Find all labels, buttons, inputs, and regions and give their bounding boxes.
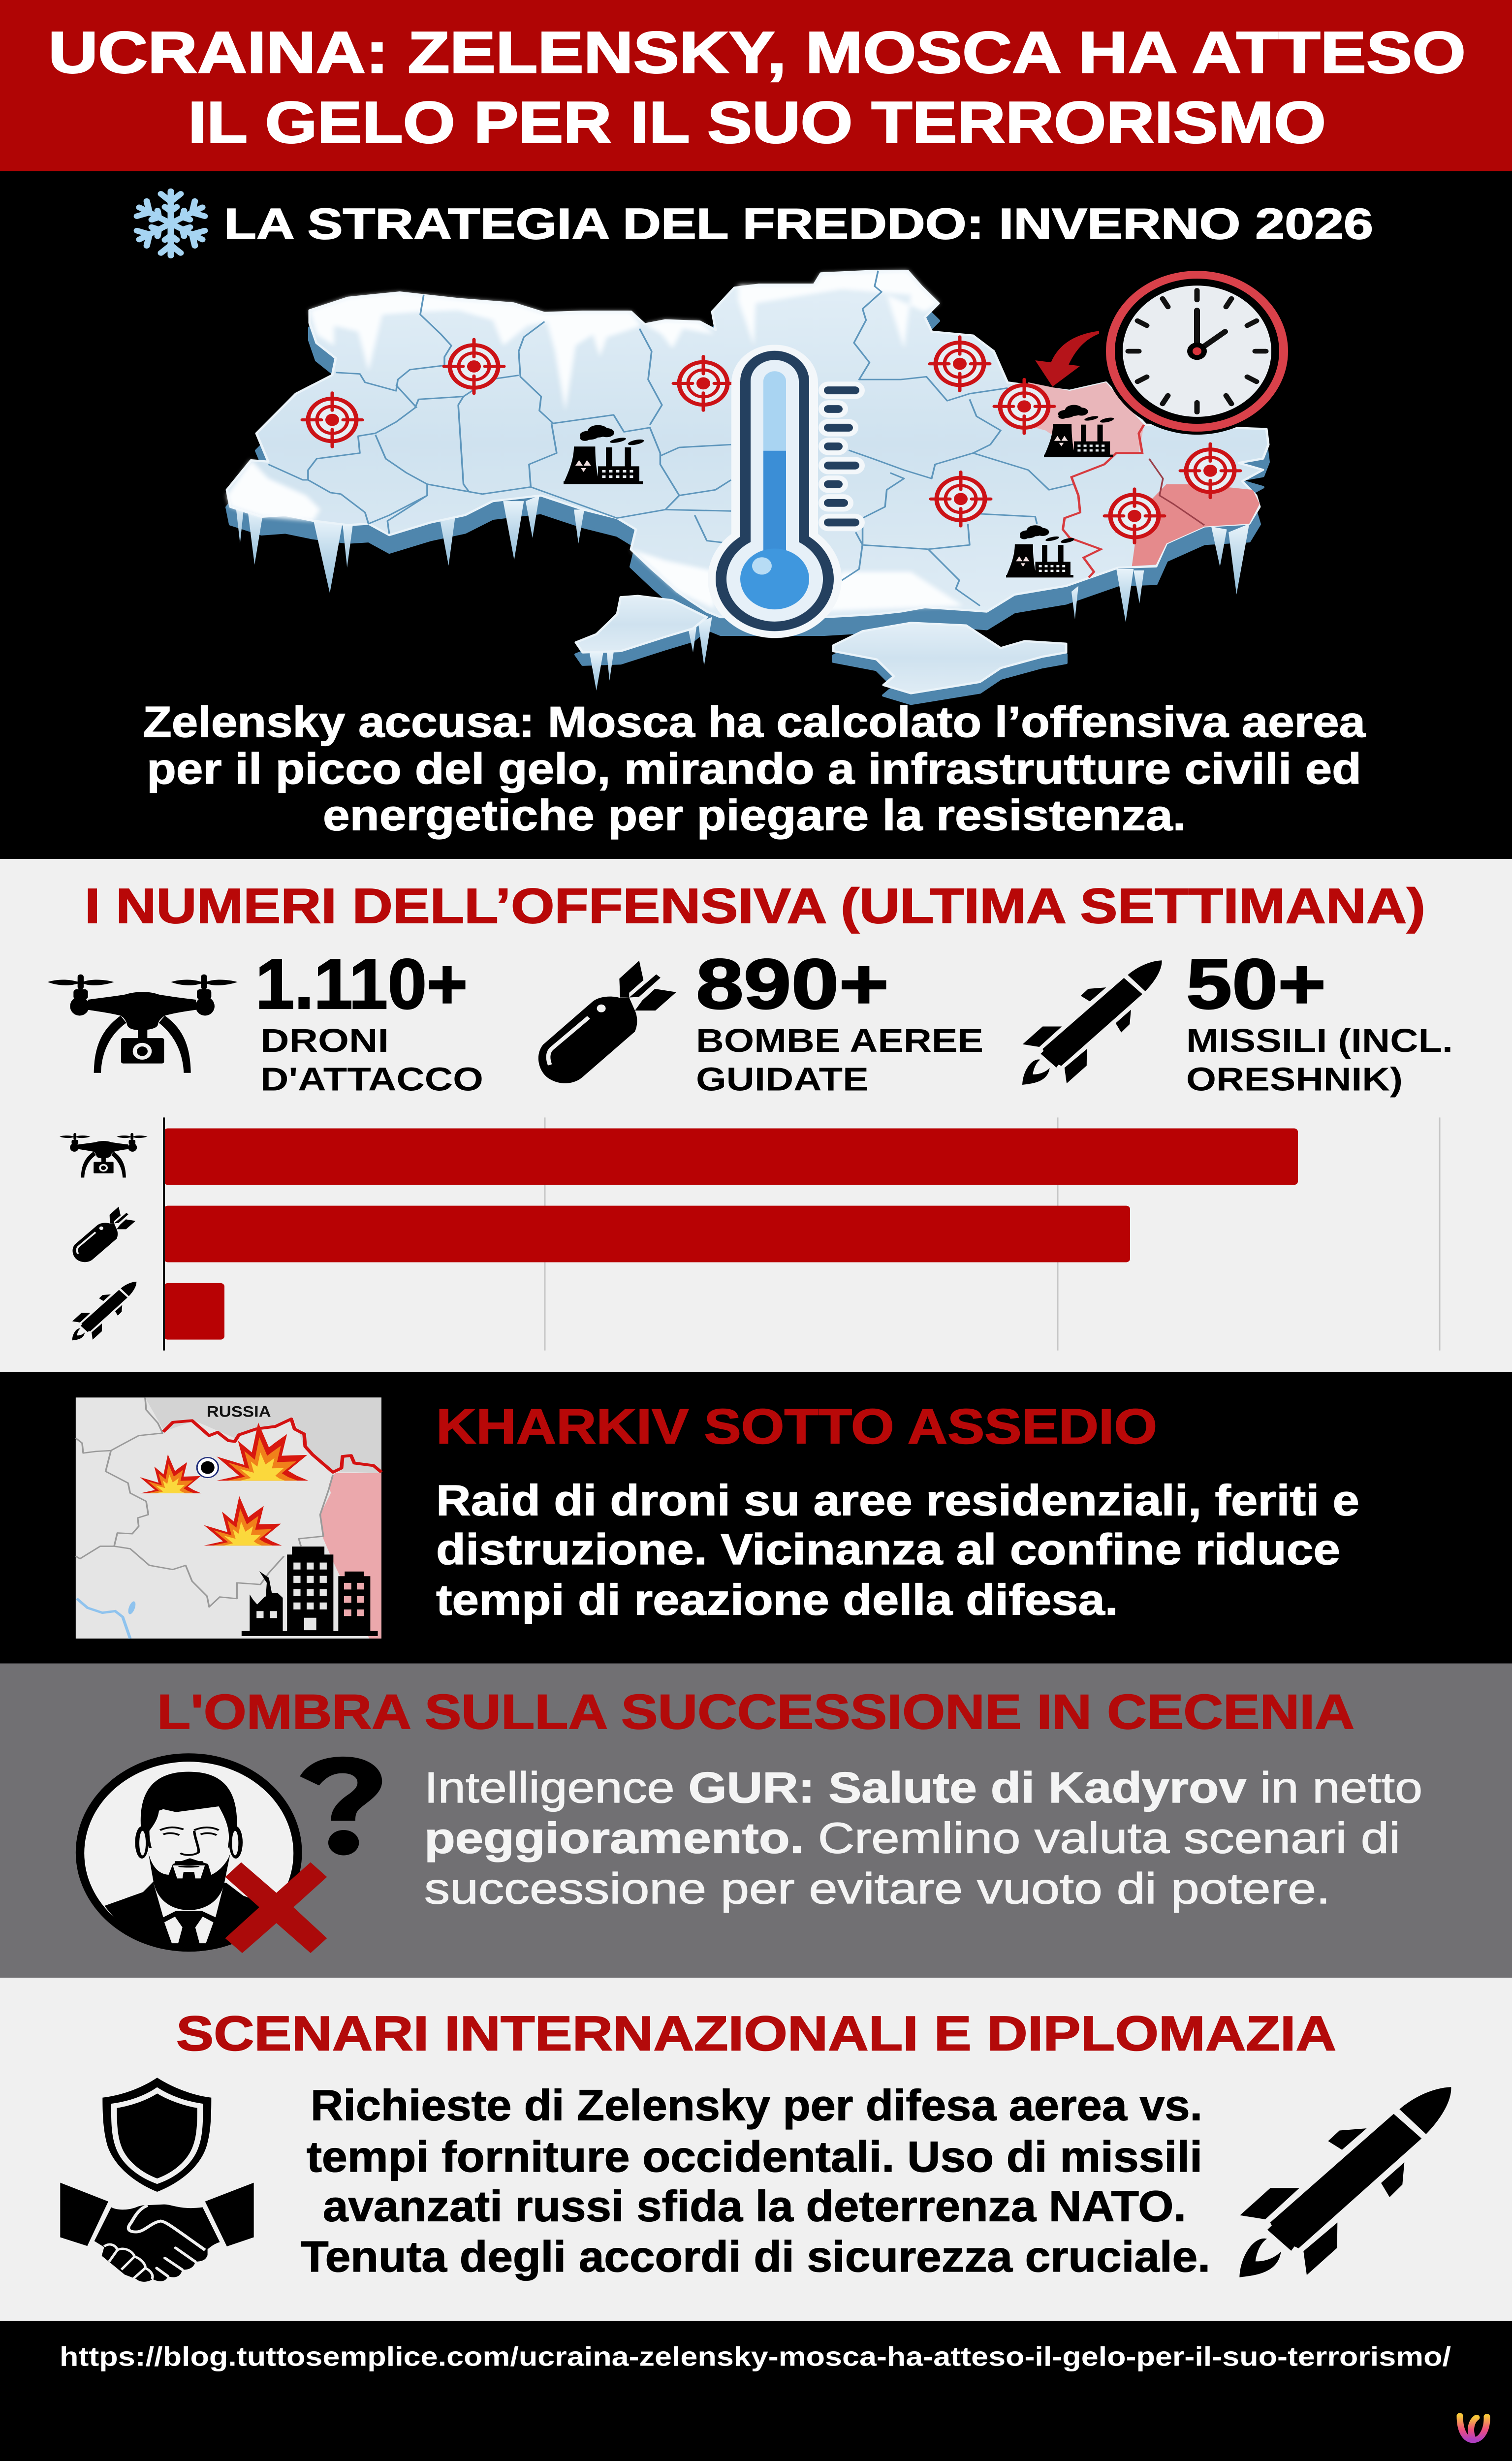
title: IL GELO PER IL SUO TERRORISMO — [188, 90, 1326, 155]
occupied areas and front line — [1025, 382, 1260, 577]
panel: offensive numbers — [0, 859, 1512, 1372]
icon: portrait with question mark and cross — [76, 1753, 382, 1953]
icon: damaged buildings — [242, 1546, 378, 1636]
stat: bombs — [538, 945, 983, 1098]
text: Zelensky accusation: per il picco del gelo, mirando a infrastrutture civili ed — [147, 745, 1361, 793]
stat: drones — [48, 945, 483, 1098]
panel: Chechnya succession — [0, 1664, 1512, 1978]
text: Chechnya: peggioramento. Cremlino valuta scenari di — [424, 1814, 1400, 1862]
bar: missiles — [164, 1283, 224, 1340]
stat: missiles: ORESHNIK) — [1186, 1061, 1403, 1098]
red cross — [225, 1862, 327, 1953]
panel: cold strategy — [0, 171, 1512, 859]
heading: cold strategy: LA STRATEGIA DEL FREDDO: INVERNO 2026 — [224, 199, 1373, 248]
icons: power plants — [564, 405, 1115, 577]
icon: logo — [1460, 2416, 1487, 2440]
panel: Kharkiv — [0, 1372, 1512, 1664]
icon: thermometer — [708, 345, 859, 638]
question mark — [300, 1757, 382, 1821]
map label: Russia: RUSSIA — [207, 1403, 271, 1420]
text: diplomacy: Tenuta degli accordi di sicurezza cruciale. — [301, 2232, 1210, 2281]
targets — [302, 337, 1240, 543]
stat: drones: DRONI — [260, 1022, 389, 1059]
bar: drones — [164, 1128, 1298, 1185]
thermometer scale ticks — [824, 386, 859, 526]
text: Zelensky accusation: Zelensky accusa: Mosca ha calcolato l’offensiva aerea — [143, 697, 1366, 746]
chart icon: drone — [60, 1133, 148, 1178]
title — [48, 20, 1466, 155]
snow caps — [227, 271, 963, 611]
text: Kharkiv: Raid di droni su aree residenziali, feriti e — [436, 1476, 1359, 1524]
text: Chechnya: successione per evitare vuoto di potere. — [424, 1864, 1330, 1913]
icon: shield and handshake — [60, 2078, 254, 2282]
map ice surface — [227, 271, 1268, 694]
stat: missiles: MISSILI (INCL. — [1186, 1022, 1453, 1059]
heading: Kharkiv: KHARKIV SOTTO ASSEDIO — [436, 1399, 1157, 1454]
icicles — [236, 496, 1249, 691]
footer — [0, 2321, 1512, 2461]
map side depth — [227, 288, 1268, 704]
text: Zelensky accusation — [143, 697, 1366, 839]
bar chart — [60, 1117, 1440, 1351]
handshake — [60, 2183, 254, 2282]
chart icon: missile — [72, 1282, 136, 1340]
text: Chechnya: Intelligence GUR: Salute di Kadyrov in netto — [424, 1764, 1422, 1812]
icon: snowflake — [134, 191, 207, 255]
shield — [102, 2078, 211, 2192]
panel: international scenarios — [0, 1978, 1512, 2321]
text: Zelensky accusation: energetiche per piegare la resistenza. — [323, 791, 1186, 839]
heading: offensive numbers: I NUMERI DELL’OFFENSIVA (ULTIMA SETTIMANA) — [85, 878, 1425, 933]
stat: missiles: 50+ — [1186, 945, 1326, 1024]
heading: Chechnya: L'OMBRA SULLA SUCCESSIONE IN CECENIA — [157, 1685, 1354, 1739]
text: Kharkiv: tempi di reazione della difesa. — [436, 1576, 1118, 1624]
stat: drones: D'ATTACCO — [260, 1061, 483, 1098]
text: diplomacy: Richieste di Zelensky per difesa aerea vs. — [311, 2081, 1202, 2129]
icons: explosions — [140, 1422, 309, 1546]
stat: bombs: GUIDATE — [696, 1061, 869, 1098]
text: diplomacy: tempi forniture occidentali. Uso di missili — [307, 2132, 1202, 2181]
bar: bombs — [164, 1206, 1130, 1262]
map: Kharkiv region — [76, 1397, 381, 1639]
marker: Kharkiv city — [197, 1457, 219, 1478]
text: Chechnya — [424, 1764, 1422, 1913]
source URL: https://blog.tuttosemplice.com/ucraina-zelensky-mosca-ha-atteso-il-gelo-per-il-suo-terrorismo/ — [60, 2342, 1451, 2372]
icon: clock — [1102, 268, 1292, 435]
arrow: clock to map — [1035, 331, 1099, 386]
stat: drones: 1.110+ — [255, 945, 468, 1024]
title: UCRAINA: ZELENSKY, MOSCA HA ATTESO — [48, 20, 1466, 85]
icon: missile — [1239, 2087, 1451, 2277]
stat: bombs: 890+ — [696, 945, 889, 1024]
text: diplomacy: avanzati russi sfida la deterrenza NATO. — [323, 2182, 1186, 2230]
text: diplomacy — [301, 2081, 1210, 2281]
stat: missiles — [1022, 945, 1453, 1098]
text: Kharkiv — [436, 1476, 1359, 1624]
chart icon: bomb — [72, 1206, 135, 1262]
text: Kharkiv: distruzione. Vicinanza al confine riduce — [436, 1525, 1340, 1574]
map: frozen Ukraine — [227, 268, 1292, 704]
region borders — [268, 271, 1073, 606]
header band — [0, 0, 1512, 171]
stat: bombs: BOMBE AEREE — [696, 1022, 983, 1059]
heading: diplomacy: SCENARI INTERNAZIONALI E DIPLOMAZIA — [176, 2007, 1336, 2061]
